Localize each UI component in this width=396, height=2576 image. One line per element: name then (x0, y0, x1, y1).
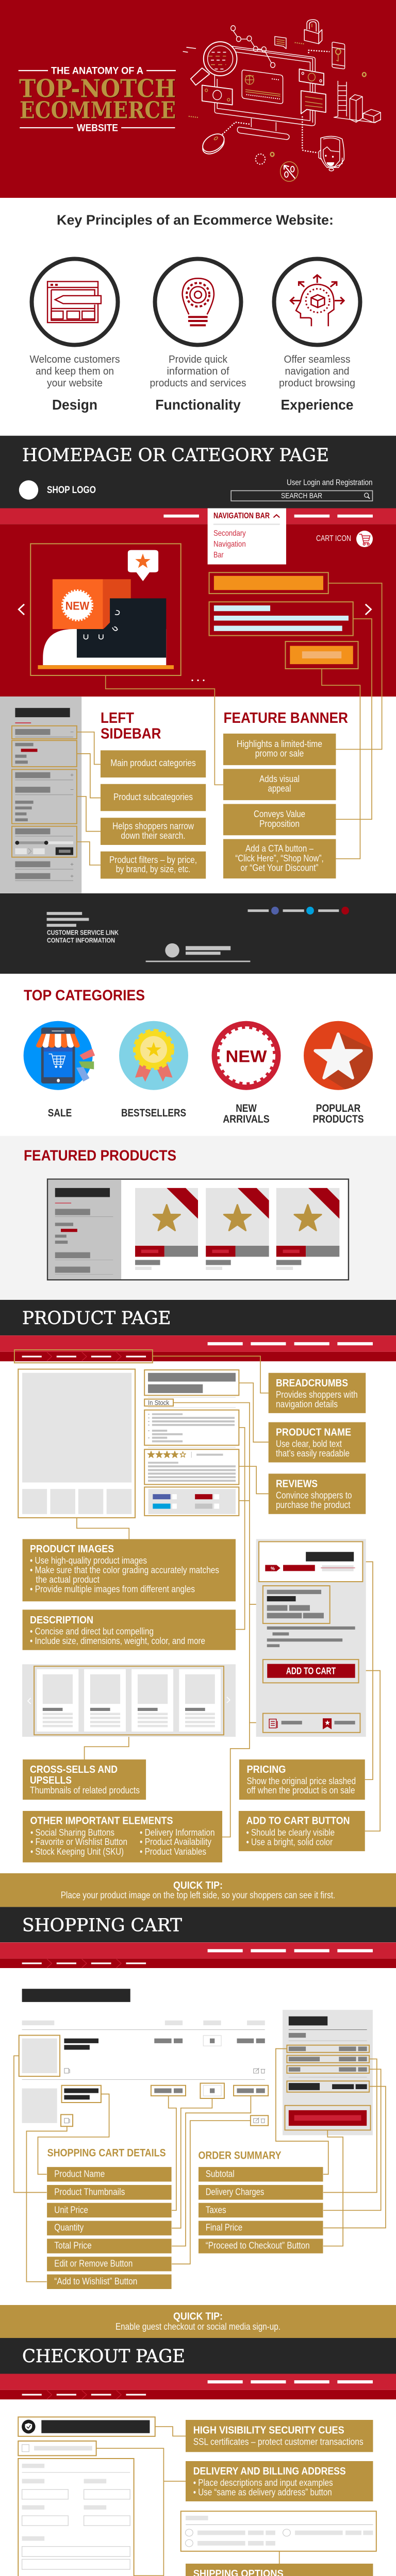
mock address form (18, 2459, 134, 2576)
navigation and breadcrumbs (0, 1942, 396, 1968)
list: order summary (199, 2167, 323, 2253)
principle: design (30, 259, 120, 413)
callout: security cues (186, 2420, 373, 2452)
product card 2 (206, 1188, 269, 1270)
mock buy box (256, 1539, 366, 1737)
connector lines: checkout (96, 2427, 279, 2576)
mock product name (144, 1370, 239, 1395)
principle: functionality: Functionality (155, 397, 241, 413)
list: order summary: Taxes (206, 2205, 226, 2215)
panel: product page (0, 1300, 396, 1862)
in stock label: In Stock (148, 1399, 170, 1406)
hero background (0, 524, 396, 697)
callout: other important elements: • Product Availability (140, 1837, 211, 1847)
principle: design: Design (52, 397, 97, 413)
price area (259, 1541, 362, 1582)
principle: experience: Experience (280, 397, 354, 413)
left sidebar callouts: down their search. (121, 831, 186, 841)
rating stars (147, 1451, 186, 1458)
callout: product images: the actual product (36, 1574, 100, 1585)
navigation bar (0, 1335, 396, 1352)
feature banner callouts: Proposition (259, 819, 300, 829)
title: WEBSITE (77, 123, 118, 134)
footer mockup: CUSTOMER SERVICE LINK (47, 928, 119, 937)
callout: product name: PRODUCT NAME (276, 1427, 351, 1438)
mock product image gallery (18, 1369, 135, 1518)
callout: product images: • Make sure that the color grading accurately matches (30, 1565, 219, 1575)
principle: design: Welcome customers (30, 354, 120, 365)
callout: other important elements: • Social Sharing Buttons (30, 1827, 114, 1838)
principle: functionality (150, 259, 246, 413)
callout: security cues: HIGH VISIBILITY SECURITY CUES (193, 2425, 344, 2436)
principle: experience: product browsing (279, 378, 355, 389)
carousel arrows and dots (19, 604, 371, 681)
left sidebar mockup (0, 697, 81, 893)
left sidebar callouts: Helps shoppers narrow (112, 821, 194, 832)
navigation dropdown (208, 508, 286, 565)
connector lines: homepage (77, 583, 382, 865)
icon: star speech bubble (128, 550, 158, 581)
hero banner (0, 0, 396, 198)
feature banner callouts: Conveys Value (254, 809, 305, 819)
callout: product images: • Use high-quality product images (30, 1555, 147, 1566)
category: popular products: PRODUCTS (312, 1113, 364, 1125)
mock cart table (19, 2021, 268, 2126)
heading: featured products: FEATURED PRODUCTS (24, 1148, 176, 1164)
left sidebar callouts: by brand, by size, etc. (116, 864, 190, 874)
search and login: SEARCH BAR (281, 492, 322, 500)
callout: reviews: Convince shoppers to (276, 1490, 352, 1500)
connector lines: product page (77, 1356, 380, 1837)
callout: cross-sells and upsells: UPSELLS (30, 1775, 72, 1786)
search and login (231, 479, 372, 501)
section header: shopping cart (0, 1907, 396, 1942)
left sidebar callouts (101, 710, 206, 878)
left sidebar callouts: SIDEBAR (101, 725, 161, 742)
callout: breadcrumbs: Provides shoppers with (276, 1389, 358, 1400)
icon: light bulb with gear (183, 278, 214, 325)
banner value proposition block (209, 602, 353, 636)
callout: product name: that’s easily readable (276, 1448, 350, 1459)
list: shopping cart details: Product Name (54, 2169, 105, 2179)
feature banner callouts: “Click Here”, “Shop Now”, (235, 853, 324, 863)
callout: pricing (239, 1759, 365, 1800)
banner promo block (209, 572, 328, 594)
category: new arrivals (211, 1021, 280, 1125)
callout: add to cart button (239, 1811, 365, 1851)
feature banner callouts: Highlights a limited-time (237, 739, 322, 749)
callout: security cues: SSL certificates – protect customer transactions (193, 2437, 364, 2447)
panel: checkout page (0, 2338, 396, 2576)
mock description (144, 1410, 239, 1445)
callout: delivery and billing address: • Use “same as delivery address” button (193, 2487, 332, 2498)
category: bestsellers (119, 1021, 188, 1119)
quick tip: product page (0, 1873, 396, 1907)
badge: new (62, 590, 93, 620)
principle: functionality: information of (167, 366, 229, 377)
callout: description: • Concise and direct but compelling (30, 1626, 154, 1637)
heading: top categories: TOP CATEGORIES (24, 988, 145, 1004)
list: shopping cart details: Unit Price (54, 2205, 88, 2215)
category: sale: SALE (48, 1107, 72, 1119)
feature banner callouts: Add a CTA button – (245, 843, 314, 854)
price area: % (271, 1566, 275, 1571)
callout: reviews: purchase the product (276, 1500, 351, 1510)
callout: product images: PRODUCT IMAGES (30, 1544, 114, 1555)
list: shopping cart details: Total Price (54, 2240, 92, 2250)
list: order summary: “Proceed to Checkout” Button (206, 2240, 310, 2250)
callout: delivery and billing address (186, 2461, 373, 2501)
feature image: new product (30, 544, 181, 675)
section header: shopping cart: SHOPPING CART (22, 1916, 182, 1936)
navigation bar (0, 508, 396, 524)
panel: featured products (0, 1136, 396, 1300)
category: new arrivals: NEW (226, 1047, 267, 1066)
search and login: User Login and Registration (287, 479, 372, 487)
mock reviews (144, 1449, 239, 1484)
callout: breadcrumbs (269, 1373, 366, 1413)
list: shopping cart details: Quantity (54, 2223, 84, 2233)
callout: add to cart button: • Should be clearly visible (246, 1827, 335, 1838)
mock shipping options (181, 2511, 376, 2551)
quick tip: shopping cart: Enable guest checkout or social media sign-up. (116, 2321, 280, 2332)
badge: new: NEW (65, 600, 89, 612)
shop logo: SHOP LOGO (47, 485, 96, 496)
callout: other important elements (23, 1811, 222, 1862)
list: order summary: Subtotal (206, 2169, 235, 2179)
list: shopping cart details (47, 2167, 172, 2289)
category: new arrivals: ARRIVALS (223, 1113, 270, 1125)
left sidebar callouts: Main product categories (110, 758, 196, 768)
cart icon: CART ICON (316, 534, 351, 543)
breadcrumbs bar (0, 1350, 396, 1363)
callout: description: DESCRIPTION (30, 1615, 93, 1626)
navigation and breadcrumbs (0, 2374, 396, 2399)
category: popular products: POPULAR (316, 1103, 360, 1114)
quick tip: product page: Place your product image on the top left side, so your shoppers can see it first. (61, 1890, 335, 1901)
section header: product page: PRODUCT PAGE (22, 1308, 171, 1329)
left sidebar callouts: LEFT (101, 710, 134, 726)
section header: product page (0, 1300, 396, 1335)
navigation dropdown: Navigation (213, 540, 246, 549)
principle: experience: navigation and (285, 366, 350, 377)
mock login checkbox (18, 2441, 96, 2455)
feature banner callouts: Adds visual (259, 774, 300, 784)
callout: description: • Include size, dimensions, weight, color, and more (30, 1636, 205, 1646)
feature banner callouts: appeal (268, 784, 291, 794)
callout: add to cart button: ADD TO CART BUTTON (246, 1816, 350, 1827)
footer mockup (0, 893, 396, 974)
navigation dropdown: NAVIGATION BAR (213, 512, 270, 520)
callout: other important elements: • Delivery Information (140, 1827, 214, 1838)
callout: cross-sells and upsells: CROSS-SELLS AND (30, 1764, 118, 1775)
heading: order summary: ORDER SUMMARY (198, 2149, 282, 2162)
callout: product images: • Provide multiple images from different angles (30, 1584, 195, 1595)
mock secure header (18, 2417, 155, 2436)
add to cart button (263, 1659, 359, 1683)
title: ECOMMERCE (20, 97, 176, 124)
callout: add to cart button: • Use a bright, solid color (246, 1837, 333, 1848)
wishlist and share icons (263, 1714, 360, 1733)
heading: shopping cart details: SHOPPING CART DETAILS (47, 2147, 166, 2159)
callout: other important elements: • Product Variables (140, 1846, 206, 1857)
callout: other important elements: • Favorite or Wishlist Button (30, 1837, 127, 1847)
banner cta button (285, 641, 358, 669)
mock social buttons (144, 1487, 239, 1516)
callout: breadcrumbs: BREADCRUMBS (276, 1378, 348, 1389)
callout: product name: Use clear, bold text (276, 1439, 342, 1449)
mock category page (47, 1179, 349, 1280)
section header: checkout page (0, 2338, 396, 2374)
callout: product name (269, 1422, 366, 1463)
feature banner callouts (223, 710, 348, 878)
callout: other important elements: • Stock Keeping Unit (SKU) (30, 1846, 124, 1857)
principle: functionality: Provide quick (169, 354, 228, 365)
callout: cross-sells and upsells (23, 1759, 146, 1800)
quick tip: product page: QUICK TIP: (173, 1880, 223, 1891)
category: bestsellers: BESTSELLERS (121, 1107, 186, 1119)
category: popular products (304, 1021, 376, 1125)
panel: homepage mockup (0, 436, 396, 974)
list: order summary: Delivery Charges (206, 2187, 264, 2197)
footer mockup: CONTACT INFORMATION (47, 937, 115, 944)
feature banner callouts: promo or sale (255, 749, 304, 759)
callout: pricing: Show the original price slashed (246, 1776, 356, 1786)
list: shopping cart details: Edit or Remove Button (54, 2258, 133, 2268)
mock page title (22, 1989, 130, 2002)
shop logo (19, 480, 96, 500)
panel: shopping cart (0, 1907, 396, 2289)
category: new arrivals: NEW (236, 1103, 257, 1114)
principle: design: your website (47, 378, 103, 389)
callout: product images (23, 1539, 236, 1601)
feature banner callouts: FEATURE BANNER (224, 710, 348, 726)
title: THE ANATOMY OF A (51, 66, 143, 76)
callout: cross-sells and upsells: Thumbnails of related products (30, 1785, 140, 1795)
icon: head with cube and arrows (290, 275, 344, 326)
callout: pricing: off when the product is on sale (246, 1785, 355, 1795)
panel: top categories (24, 988, 376, 1125)
section header: homepage: HOMEPAGE OR CATEGORY PAGE (22, 445, 329, 466)
product card 1 (135, 1188, 198, 1270)
quick tip: shopping cart: QUICK TIP: (173, 2311, 223, 2323)
principle: design: and keep them on (36, 366, 114, 377)
callout: delivery and billing address: DELIVERY AND BILLING ADDRESS (193, 2466, 346, 2477)
heading: key principles: Key Principles of an Ecommerce Website: (57, 212, 334, 228)
title: TOP-NOTCH (19, 75, 176, 104)
principle: experience (274, 259, 360, 413)
title (19, 66, 176, 134)
list: shopping cart details: “Add to Wishlist” Button (54, 2276, 137, 2286)
navigation dropdown: Bar (213, 551, 224, 560)
icon: browser and pencil (47, 281, 101, 323)
section header: checkout page: CHECKOUT PAGE (22, 2346, 185, 2367)
callout: other important elements: OTHER IMPORTANT ELEMENTS (30, 1816, 173, 1827)
principle: experience: Offer seamless (284, 354, 351, 365)
list: shopping cart details: Product Thumbnails (54, 2187, 125, 2197)
category: sale (24, 1021, 95, 1119)
callout: reviews: REVIEWS (276, 1478, 318, 1489)
callout: pricing: PRICING (246, 1764, 286, 1775)
illustration: computer with ecommerce icons (183, 20, 381, 181)
add to cart button: ADD TO CART (286, 1666, 336, 1676)
quick tip: shopping cart (0, 2305, 396, 2338)
product card 3 (276, 1188, 339, 1270)
list: order summary: Final Price (206, 2223, 242, 2233)
variables area (263, 1586, 355, 1647)
panel: key principles (30, 259, 360, 413)
callout: breadcrumbs: navigation details (276, 1399, 338, 1409)
mock order summary (283, 2010, 373, 2136)
navigation dropdown: Secondary (213, 529, 246, 538)
mock cross-sell carousel (22, 1664, 236, 1737)
left sidebar callouts: Product filters – by price, (109, 855, 197, 865)
connector lines: shopping cart (14, 2049, 386, 2282)
callout: reviews (269, 1473, 366, 1514)
cart icon (316, 531, 373, 547)
principle: functionality: products and services (150, 378, 246, 389)
left sidebar callouts: Product subcategories (113, 792, 193, 802)
section header: homepage (0, 436, 396, 508)
callout: description (23, 1609, 236, 1650)
feature banner callouts: or “Get Your Discount” (240, 862, 319, 873)
callout: delivery and billing address: • Place descriptions and input examples (193, 2478, 333, 2488)
callout: shipping options (186, 2564, 373, 2576)
